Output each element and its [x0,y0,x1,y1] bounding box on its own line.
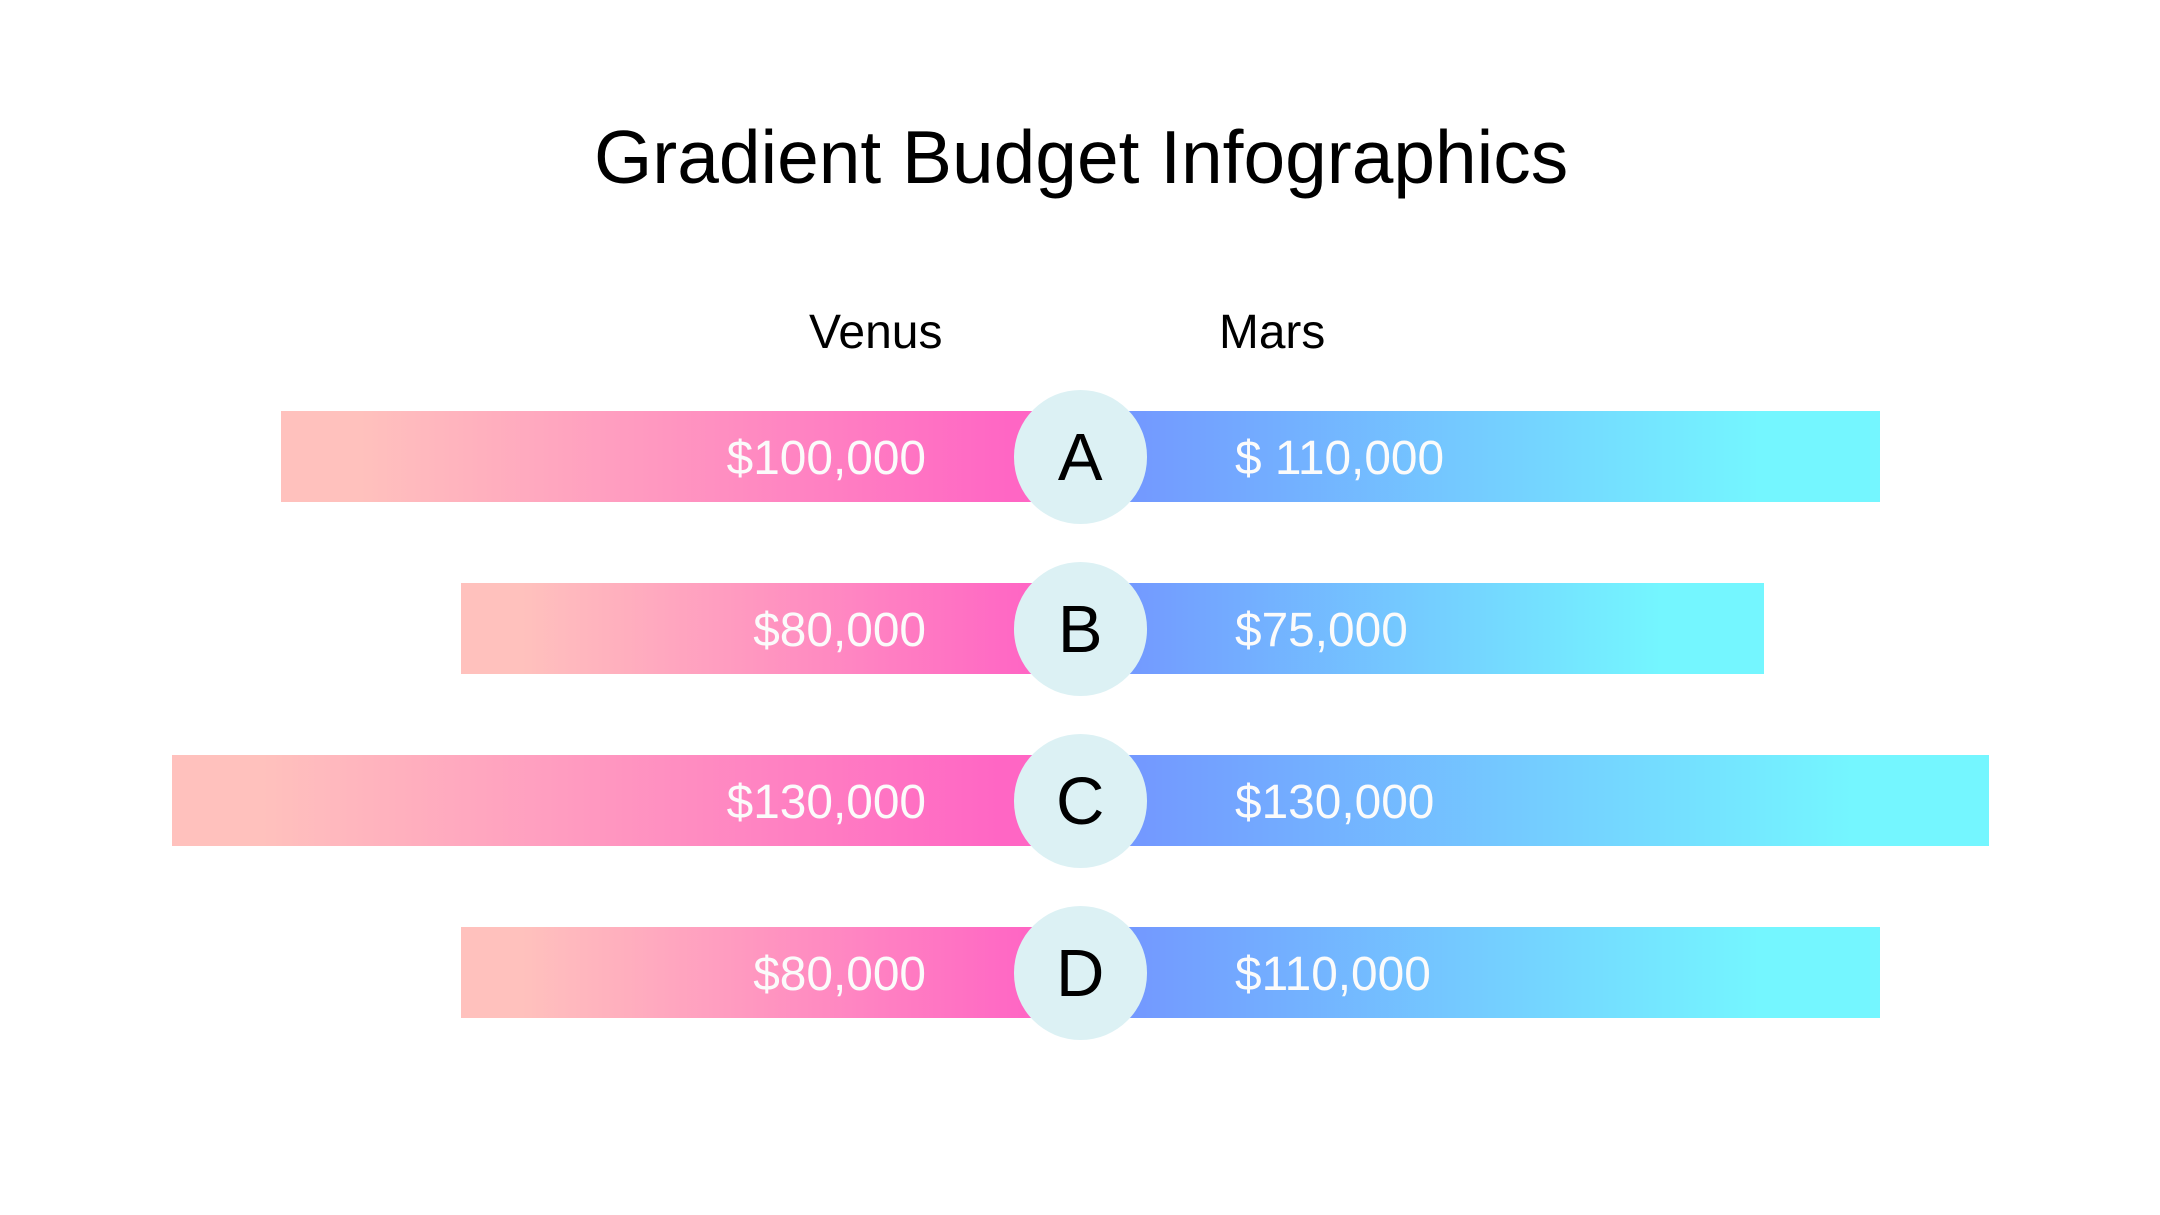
column heading: Mars: Mars [1219,306,1325,359]
row C [172,734,1989,868]
value: Mars C: $130,000 [1235,776,1434,829]
badge D [1014,906,1147,1040]
badge B: B [1058,592,1103,667]
bar: Mars D [1080,927,1880,1018]
badge C: C [1056,764,1104,839]
badge A [1014,390,1147,524]
value: Mars D: $110,000 [1235,948,1431,1001]
badge D: D [1056,936,1104,1011]
bar: Venus B [461,583,1081,674]
value: Mars A: $ 110,000 [1235,432,1444,485]
value: Venus D: $80,000 [753,948,926,1001]
row D [461,906,1880,1040]
bar: Venus C [172,755,1081,846]
column heading: Venus: Venus [809,306,942,359]
value: Mars B: $75,000 [1235,604,1408,657]
row A [281,390,1880,524]
bar: Mars C [1080,755,1989,846]
bar: Mars A [1080,411,1880,502]
badge B [1014,562,1147,696]
title: Gradient Budget Infographics [594,115,1568,199]
badge A: A [1058,420,1103,495]
badge C [1014,734,1147,868]
bar: Mars B [1080,583,1764,674]
value: Venus B: $80,000 [753,604,926,657]
bar: Venus D [461,927,1081,1018]
row B [461,562,1764,696]
value: Venus C: $130,000 [727,776,926,829]
value: Venus A: $100,000 [727,432,926,485]
bar: Venus A [281,411,1081,502]
